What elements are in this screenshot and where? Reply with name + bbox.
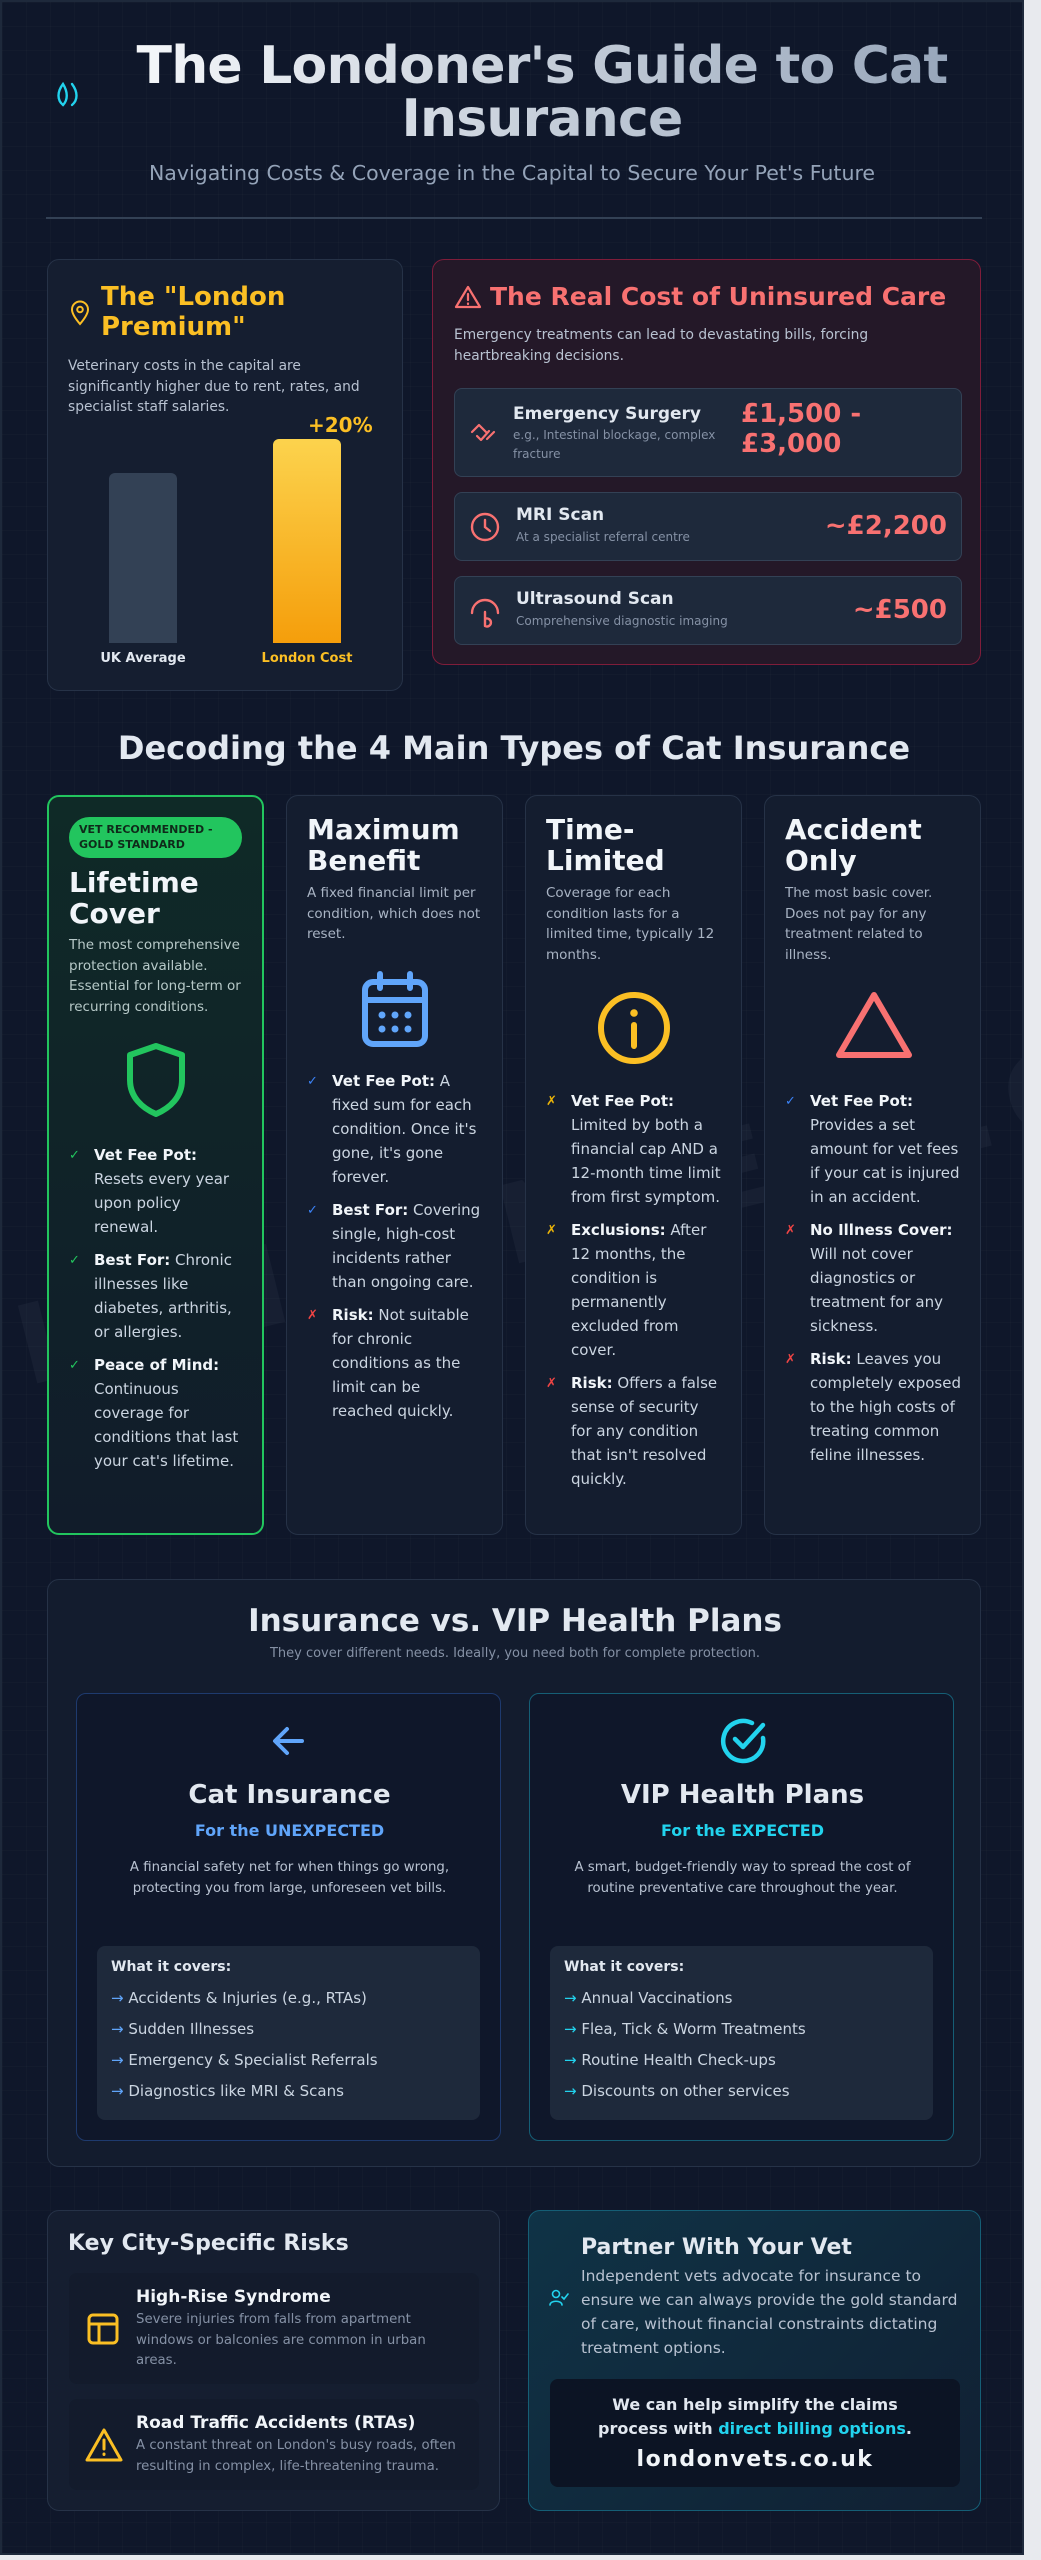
card: vip: What it covers:: [564, 1959, 684, 1975]
card: accident only: ✗: [785, 1352, 796, 1367]
types cards: [47, 795, 981, 1535]
panel: insurance vs vip: [47, 1579, 981, 2167]
callout: londonvets.co.uk: [637, 2447, 873, 2472]
risk: rta: [69, 2399, 479, 2490]
card: time limited: Limited: [546, 844, 665, 877]
card: vip: A smart, budget-friendly way to spread the cost of routine preventative care throughout the year.: [574, 1860, 911, 1896]
card: max benefit: Risk: Not suitable for chronic conditions as the limit can be reached quickly.: [332, 1306, 469, 1420]
card: accident only: The most basic cover. Does not pay for any treatment related to illness.: [785, 885, 932, 963]
card: max benefit: Vet Fee Pot: A fixed sum for each condition. Once it's gone, it's gone forever.: [332, 1072, 476, 1186]
bar chart: London Cost: [262, 651, 352, 666]
card: accident only: Vet Fee Pot: Provides a set amount for vet fees if your cat is injured in an accident.: [810, 1092, 960, 1206]
card: insurance: For the UNEXPECTED: [195, 1821, 384, 1840]
title: The Londoner's Guide to Cat Insurance: [137, 36, 947, 149]
subtitle: Navigating Costs & Coverage in the Capital to Secure Your Pet's Future: [149, 161, 875, 185]
card: insurance: Cat Insurance: [188, 1780, 391, 1810]
row: mri: [454, 492, 962, 561]
card: lifetime: Peace of Mind: Continuous coverage for conditions that last your cat's lifetime.: [94, 1356, 238, 1470]
card: lifetime: The most comprehensive protection available. Essential for long-term or recurring conditions.: [69, 937, 241, 1015]
card: accident only: Only: [785, 844, 857, 877]
panel: partner: Partner With Your Vet: [581, 2235, 852, 2260]
callout: [550, 2379, 960, 2487]
callout: We can help simplify the claims: [612, 2395, 898, 2414]
panel: city risks: [47, 2210, 500, 2511]
card: time limited: ✗: [546, 1223, 557, 1238]
card: max benefit: Best For: Covering single, high-cost incidents rather than ongoing care.: [332, 1201, 480, 1291]
text: Veterinary costs in the capital are significantly higher due to rent, rates, and specialist staff salaries.: [68, 358, 360, 415]
card: accident only: ✓: [785, 1094, 796, 1109]
card: lifetime: ✓: [69, 1253, 80, 1268]
card: accident only: ✗: [785, 1223, 796, 1238]
row: ultrasound: Ultrasound Scan: [516, 589, 674, 609]
card: accident only: Risk: Leaves you completely exposed to the high costs of treating common feline illnesses.: [810, 1350, 961, 1464]
card: vip: For the EXPECTED: [661, 1821, 824, 1840]
heading: The "London: [101, 282, 285, 312]
risk: high-rise: High-Rise Syndrome: [136, 2287, 331, 2307]
row: mri: MRI Scan: [516, 505, 604, 525]
row: ultrasound: Comprehensive diagnostic imaging: [516, 614, 728, 628]
heading: The Real Cost of Uninsured Care: [490, 282, 946, 311]
card: time limited: Time-: [546, 813, 634, 846]
row: mri: At a specialist referral centre: [516, 530, 690, 544]
panel: partner: Independent vets advocate for insurance to ensure we can always provide the gold standard of care, without financial constraints dictating treatment options.: [581, 2267, 957, 2357]
bar chart: +20%: [308, 413, 373, 437]
card: time limited: ✗: [546, 1094, 557, 1109]
card: max benefit: A fixed financial limit per condition, which does not reset.: [307, 885, 480, 942]
panel: partner: [528, 2210, 981, 2511]
card: insurance: [76, 1693, 501, 2141]
card: accident only: No Illness Cover: Will not cover diagnostics or treatment for any sickness.: [810, 1221, 953, 1335]
heading: Premium": [101, 312, 246, 342]
bar chart: [100, 413, 373, 666]
card: max benefit: ✓: [307, 1074, 318, 1089]
risk: rta: Road Traffic Accidents (RTAs): [136, 2413, 415, 2433]
row: surgery: e.g., Intestinal blockage, complex fracture: [513, 428, 715, 461]
row: mri: ~£2,200: [825, 511, 947, 541]
risk: high-rise: [69, 2273, 479, 2384]
card: lifetime: VET RECOMMENDED - GOLD STANDARD: [79, 823, 213, 851]
heading: [101, 282, 285, 342]
card: time limited: Exclusions: After 12 months, the condition is permanently excluded from cover.: [571, 1221, 706, 1359]
card: max benefit: ✓: [307, 1203, 318, 1218]
card: insurance: → Accidents & Injuries (e.g., RTAs): [111, 1989, 367, 2007]
card: insurance: → Diagnostics like MRI & Scans: [111, 2082, 344, 2100]
callout: process with direct billing options.: [598, 2419, 912, 2438]
card: insurance: A financial safety net for when things go wrong, protecting you from large, unforeseen vet bills.: [130, 1860, 449, 1896]
card: lifetime: ✓: [69, 1148, 80, 1163]
card: time limited: Vet Fee Pot: Limited by both a financial cap AND a 12-month time limit from first symptom.: [571, 1092, 721, 1206]
icon: warning: [454, 286, 482, 308]
heading: Insurance vs. VIP Health Plans: [248, 1603, 782, 1639]
icon: pin: [71, 300, 89, 326]
card: insurance: What it covers:: [111, 1959, 231, 1975]
bar chart: UK Average: [100, 651, 186, 666]
panel: insurance vs vip: They cover different needs. Ideally, you need both for complete protection.: [270, 1646, 760, 1661]
card: vip: [529, 1693, 954, 2141]
card: vip: VIP Health Plans: [621, 1780, 864, 1810]
row: ultrasound: [454, 576, 962, 645]
card: time limited: Risk: Offers a false sense of security for any condition that isn't resolved quickly.: [571, 1374, 717, 1488]
card: accident only: Accident: [785, 813, 922, 846]
card: time limited: Coverage for each condition lasts for a limited time, typically 12 months.: [546, 885, 714, 963]
risk: high-rise: Severe injuries from falls from apartment windows or balconies are common in urban areas.: [136, 2312, 426, 2368]
card: lifetime: Lifetime: [69, 866, 199, 899]
card: lifetime: Vet Fee Pot: Resets every year upon policy renewal.: [94, 1146, 229, 1236]
row: ultrasound: ~£500: [853, 595, 947, 625]
card: vip: → Discounts on other services: [564, 2082, 790, 2100]
row: surgery: £3,000: [741, 429, 841, 459]
card: max benefit: ✗: [307, 1308, 318, 1323]
panel: london premium: [47, 259, 403, 691]
icon: logo: [57, 82, 78, 107]
text: Emergency treatments can lead to devastating bills, forcing heartbreaking decisions.: [454, 327, 868, 364]
card: max benefit: Benefit: [307, 844, 420, 877]
card: lifetime: Best For: Chronic illnesses like diabetes, arthritis, or allergies.: [94, 1251, 232, 1341]
row: surgery: [454, 388, 962, 477]
panel: city risks: Key City-Specific Risks: [68, 2231, 349, 2256]
row: surgery: £1,500 -: [741, 399, 861, 429]
card: time limited: [525, 795, 742, 1535]
card: lifetime: [47, 795, 264, 1535]
card: time limited: ✗: [546, 1376, 557, 1391]
card: lifetime: ✓: [69, 1358, 80, 1373]
card: max benefit: [286, 795, 503, 1535]
card: vip: → Routine Health Check-ups: [564, 2051, 776, 2069]
card: accident only: [764, 795, 981, 1535]
card: max benefit: Maximum: [307, 813, 460, 846]
card: lifetime: Cover: [69, 897, 160, 930]
card: vip: → Annual Vaccinations: [564, 1989, 732, 2007]
card: vip: → Flea, Tick & Worm Treatments: [564, 2020, 806, 2038]
panel: real cost: [432, 259, 981, 665]
card: insurance: → Sudden Illnesses: [111, 2020, 254, 2038]
section heading: types: Decoding the 4 Main Types of Cat Insurance: [118, 729, 910, 767]
row: surgery: Emergency Surgery: [513, 404, 701, 424]
risk: rta: A constant threat on London's busy roads, often resulting in complex, life-threatening trauma.: [136, 2438, 456, 2474]
card: insurance: → Emergency & Specialist Referrals: [111, 2051, 378, 2069]
